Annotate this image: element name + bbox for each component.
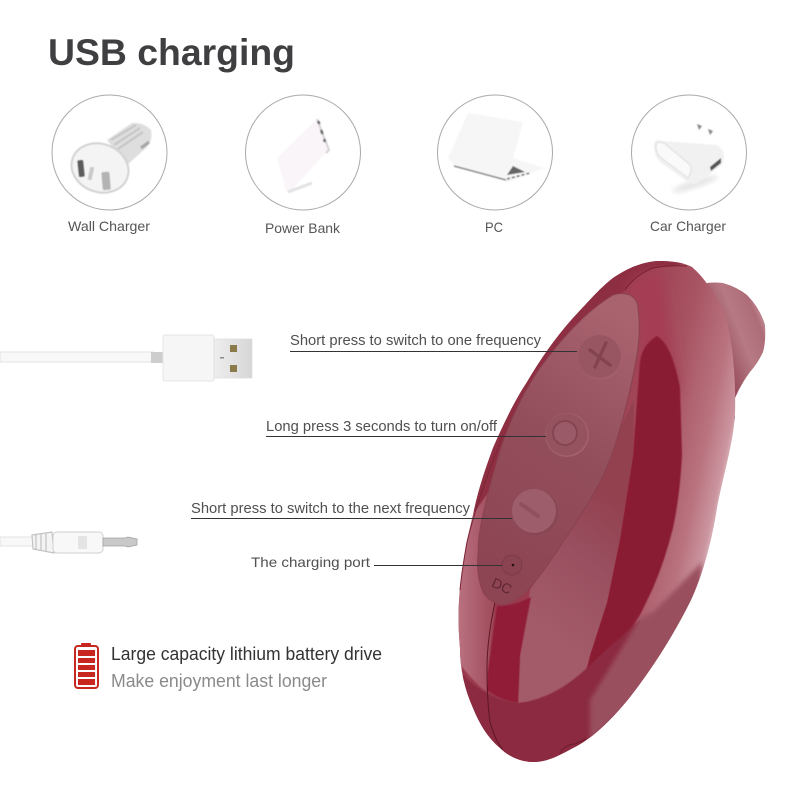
charger label: power bank: Power Bank xyxy=(265,220,341,236)
left edge seam xyxy=(460,435,503,590)
charging port xyxy=(502,555,522,575)
icon: laptop xyxy=(448,113,544,182)
upper dark rim xyxy=(460,261,684,580)
product: device xyxy=(450,250,765,790)
charging option: car charger xyxy=(632,95,746,210)
icon: wall plug xyxy=(654,124,724,195)
button: power xyxy=(545,413,589,457)
button: plus xyxy=(578,335,622,380)
charging option: power bank xyxy=(246,95,360,210)
annotation: one frequency: Short press to switch to one frequency xyxy=(290,333,542,349)
annotation: next frequency: Short press to switch to the next frequency xyxy=(191,501,471,517)
icon: car adapter xyxy=(65,123,152,200)
battery heading: Large capacity lithium battery drive xyxy=(111,644,382,664)
lower dark sweep xyxy=(462,620,642,762)
lower stripe xyxy=(487,597,531,703)
button: minus xyxy=(512,489,558,535)
plug housing xyxy=(163,335,214,381)
charging option: PC xyxy=(438,95,552,210)
DC label: DC xyxy=(489,574,514,597)
icon: power bank xyxy=(277,119,329,192)
upper shade toward stripe xyxy=(639,285,682,384)
title: USB charging xyxy=(48,32,295,73)
pink mid section xyxy=(518,400,634,703)
strain relief xyxy=(32,532,54,553)
bottom switch xyxy=(560,739,586,753)
charger label: wall charger: Wall Charger xyxy=(68,218,150,234)
USB cable xyxy=(0,335,252,381)
metal connector xyxy=(214,339,252,378)
jack body xyxy=(53,532,103,553)
annotation: charging port: The charging port xyxy=(251,554,370,570)
cable xyxy=(0,537,34,546)
button panel xyxy=(478,294,639,605)
charger label: car charger: Car Charger xyxy=(650,218,726,234)
main dark stripe xyxy=(587,336,682,668)
charger label: PC: PC xyxy=(485,219,503,235)
icon: battery xyxy=(75,643,98,688)
lower left highlight xyxy=(458,493,494,692)
charging option: wall charger xyxy=(52,95,167,210)
cable xyxy=(0,352,153,362)
device nozzle xyxy=(707,282,765,420)
DC jack cable xyxy=(0,532,137,553)
annotation: on/off: Long press 3 seconds to turn on/off xyxy=(266,419,498,435)
top seam xyxy=(625,266,687,290)
lower seam xyxy=(487,602,503,750)
jack pin xyxy=(103,537,137,547)
device body xyxy=(458,261,736,762)
battery subtext: Make enjoyment last longer xyxy=(111,671,327,691)
lower right band xyxy=(590,562,702,740)
